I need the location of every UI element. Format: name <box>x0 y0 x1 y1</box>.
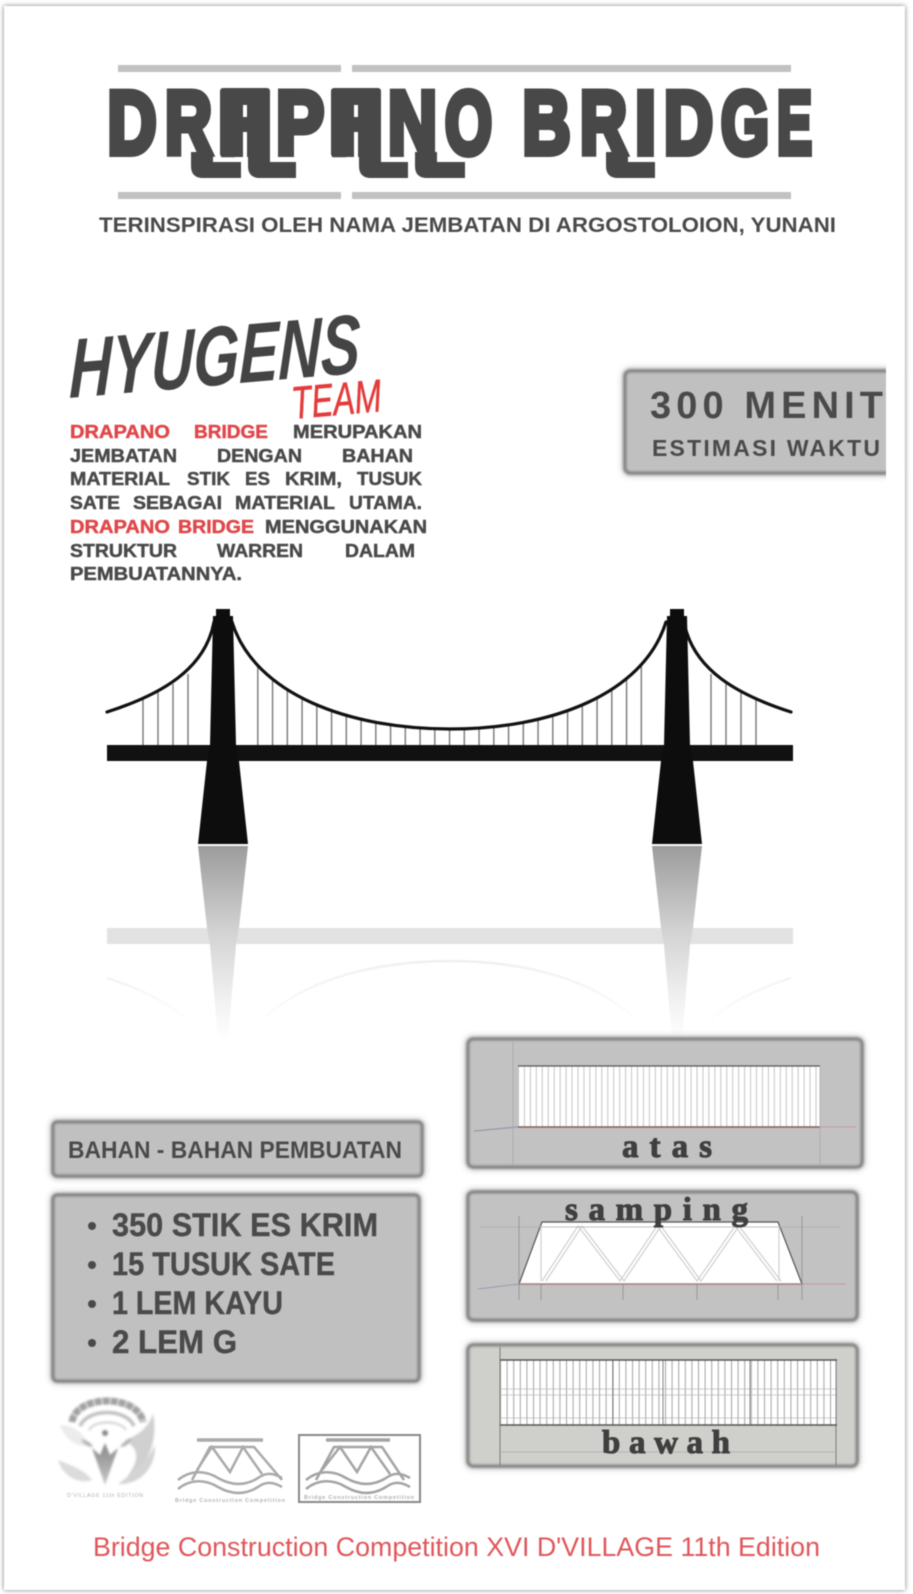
description paragraph: KRIM, <box>285 468 342 489</box>
title: drapano bridge: P <box>276 72 324 172</box>
top view drawing <box>474 1040 856 1165</box>
description paragraph: BRIDGE <box>194 421 268 442</box>
title descender hooks <box>191 152 655 178</box>
description paragraph: MATERIAL <box>70 468 170 489</box>
title squared letter backing <box>220 88 381 158</box>
logo: d'village owl <box>58 1401 155 1499</box>
title: drapano bridge: G <box>721 72 769 172</box>
description paragraph: STIK <box>187 468 231 489</box>
title: drapano bridge: B <box>522 72 570 172</box>
main cables <box>107 622 791 729</box>
list items: 2 LEM G <box>112 1324 237 1360</box>
team label: TEAM <box>289 369 384 429</box>
title rule top <box>118 65 791 72</box>
team name: hyugens: HYUGENS <box>69 296 361 416</box>
footer: Bridge Construction Competition XVI D'VILLAGE 11th Edition <box>93 1532 820 1562</box>
time value: 300 MENIT <box>650 385 883 427</box>
list items: 350 STIK ES KRIM <box>112 1207 378 1243</box>
team name: hyugens <box>69 296 384 429</box>
title: drapano bridge: A <box>334 72 378 172</box>
description paragraph: SEBAGAI <box>133 492 222 513</box>
description paragraph: TUSUK <box>357 468 423 489</box>
logo: bridge construction competition <box>175 1440 286 1504</box>
description paragraph: BAHAN <box>342 445 413 466</box>
list bullets <box>88 1222 96 1347</box>
tower right <box>652 609 702 844</box>
description paragraph: DALAM <box>345 540 415 561</box>
description paragraph: BRIDGE <box>178 516 254 537</box>
top view label: atas <box>622 1129 712 1165</box>
hangers <box>142 666 758 746</box>
bridge illustration <box>107 609 793 844</box>
framed logo caption: Bridge Construction Competition <box>304 1495 415 1501</box>
list items: 15 TUSUK SATE <box>112 1246 335 1282</box>
description paragraph: UTAMA. <box>349 492 422 513</box>
description paragraph: MENGGUNAKAN <box>265 516 427 537</box>
subtitle: TERINSPIRASI OLEH NAMA JEMBATAN DI ARGOSTOLOION, YUNANI <box>99 214 836 237</box>
description paragraph: MERUPAKAN <box>293 421 422 442</box>
title: drapano bridge: R <box>165 72 212 172</box>
bridge reflection <box>107 846 793 1068</box>
description paragraph: DRAPANO <box>70 516 170 537</box>
bottom view drawing <box>500 1347 837 1465</box>
description paragraph: JEMBATAN <box>70 445 177 466</box>
panel: side view <box>468 1192 857 1320</box>
description paragraph: MATERIAL <box>235 492 335 513</box>
description paragraph: DRAPANO <box>70 421 170 442</box>
panel: materials list <box>53 1195 419 1381</box>
list items <box>112 1207 378 1360</box>
title: drapano bridge: O <box>445 72 492 172</box>
side view label: samping <box>565 1192 748 1228</box>
title block <box>99 65 836 237</box>
description paragraph: DENGAN <box>217 445 302 466</box>
time label: ESTIMASI WAKTU <box>652 435 880 461</box>
title: drapano bridge: D <box>664 72 713 172</box>
owl logo caption: D'VILLAGE 11th EDITION <box>67 1493 143 1499</box>
description paragraph <box>70 421 427 584</box>
description paragraph: SATE <box>70 492 120 513</box>
panel: materials heading: BAHAN - BAHAN PEMBUATAN <box>68 1137 402 1164</box>
panel: materials heading <box>53 1122 422 1176</box>
panel: top view <box>468 1039 862 1167</box>
title: drapano bridge: E <box>777 72 812 172</box>
title: drapano bridge: R <box>580 72 627 172</box>
deck <box>107 745 793 761</box>
tower left <box>198 609 248 844</box>
time estimate box <box>625 355 903 490</box>
description paragraph: STRUKTUR <box>70 540 177 561</box>
title: drapano bridge: D <box>108 72 156 172</box>
logo caption: Bridge Construction Competition <box>175 1498 286 1504</box>
description paragraph: WARREN <box>217 540 303 561</box>
title: drapano bridge: I <box>635 72 656 172</box>
side view truss drawing <box>478 1216 846 1300</box>
panel: bottom view <box>468 1345 857 1466</box>
list items: 1 LEM KAYU <box>112 1285 283 1321</box>
description paragraph: ES <box>245 468 270 489</box>
bottom view label: bawah <box>602 1425 730 1461</box>
description paragraph: PEMBUATANNYA. <box>70 563 242 584</box>
title rule bottom <box>118 192 791 199</box>
logo: framed bridge construction competition <box>299 1435 420 1502</box>
title: drapano bridge: A <box>223 72 267 172</box>
title: drapano bridge: N <box>388 72 437 172</box>
